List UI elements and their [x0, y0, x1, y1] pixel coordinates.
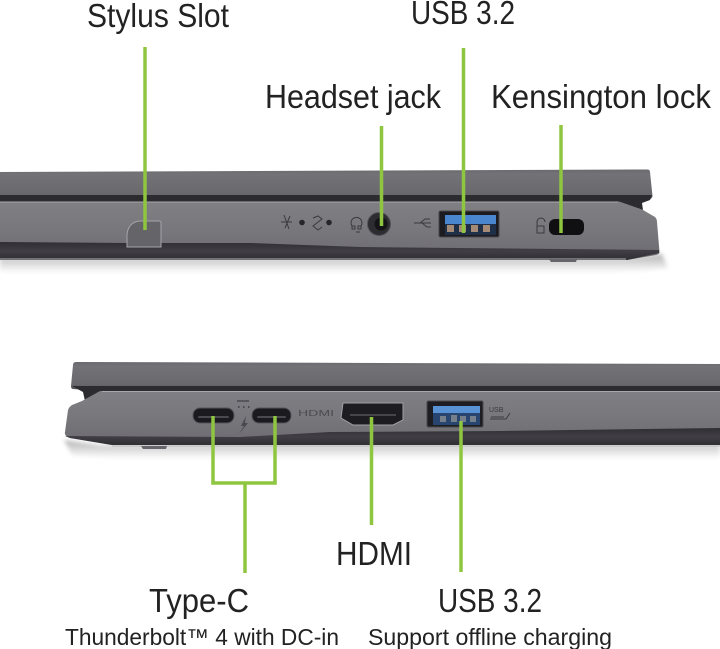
icon: lightning bolt: [239, 416, 248, 434]
icon: usb charging: [489, 407, 510, 419]
hinge gap: [72, 386, 720, 401]
kensington lock slot: [549, 219, 584, 235]
line: hdmi: [370, 417, 373, 525]
icon: usb charging: USB: [489, 407, 504, 414]
label: hdmi: HDMI: [336, 535, 412, 572]
highlight line: [0, 201, 618, 203]
usb port: [439, 211, 499, 237]
line: kensington lock: [559, 125, 563, 233]
callout lines: [145, 47, 561, 573]
status led 2: [326, 220, 332, 225]
laptop: right side view: [64, 362, 720, 459]
lid: [71, 362, 720, 390]
bottom dark band: [0, 242, 659, 260]
label: usb 3.2 bottom: USB 3.2: [438, 582, 542, 619]
icon: lock: [537, 218, 545, 233]
lid: [0, 170, 652, 201]
shadow: [0, 254, 668, 273]
hinge gap: [0, 195, 652, 210]
line: stylus slot: [143, 47, 147, 230]
type-c port 1: [193, 408, 234, 423]
label: headset jack: Headset jack: [265, 78, 441, 115]
line: usb bottom: [459, 421, 463, 572]
foot: [141, 446, 167, 449]
status icons: [281, 215, 322, 230]
thunderbolt marks: [237, 401, 250, 434]
label: kensington lock: Kensington lock: [491, 78, 711, 115]
shadow: [64, 440, 720, 459]
line: type-c bracket: [213, 416, 275, 573]
line: headset jack: [380, 126, 383, 226]
icon: headset: [351, 217, 362, 232]
base: [65, 391, 720, 445]
icon: usb symbol: [414, 219, 431, 227]
icon: battery: [313, 216, 322, 230]
status led 1: [299, 220, 305, 225]
foot: [549, 259, 577, 262]
label: type-c: Type-C: [149, 582, 249, 619]
laptop: left side view: [0, 170, 668, 273]
stylus slot: [127, 221, 161, 247]
headset jack: [368, 212, 390, 236]
hdmi label: HDMI: [298, 409, 334, 418]
icon: power: [281, 215, 292, 229]
base: [0, 202, 660, 260]
usb port: [427, 401, 483, 427]
highlight line: [102, 390, 720, 392]
hdmi port: [341, 403, 403, 425]
line: usb top: [462, 48, 465, 233]
bottom dark band: [65, 428, 720, 445]
type-c port 2: [252, 408, 291, 423]
